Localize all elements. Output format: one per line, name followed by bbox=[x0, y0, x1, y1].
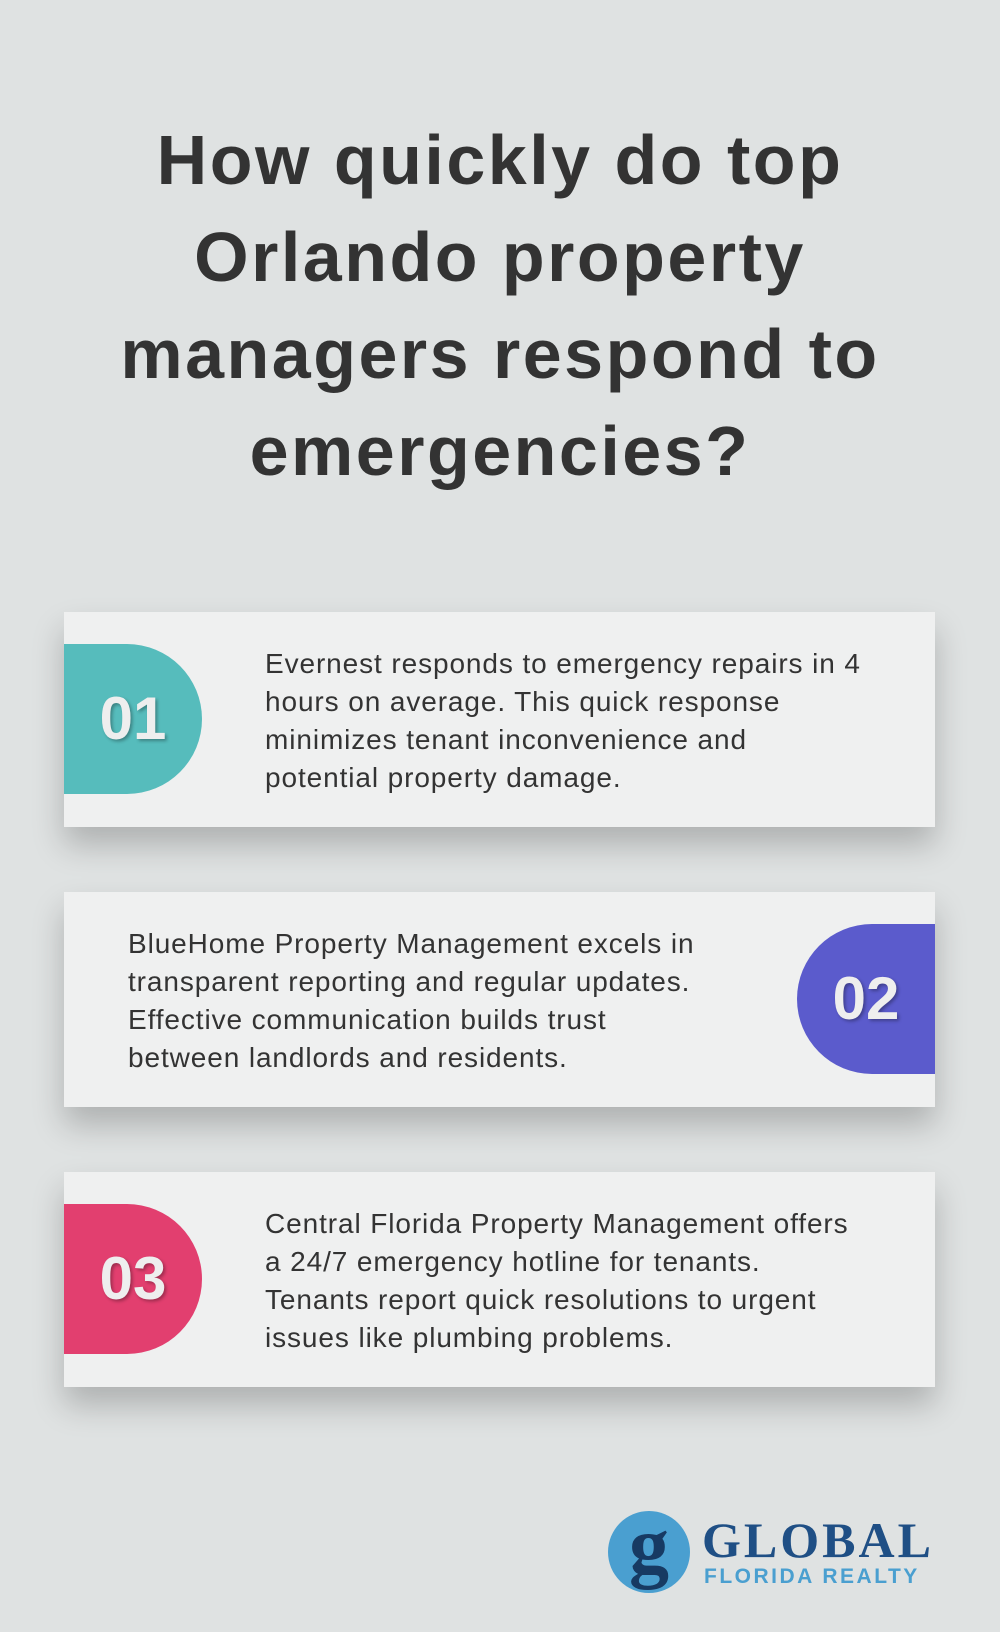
panel: card 1 bbox=[64, 612, 935, 827]
badge 03 bbox=[64, 1204, 202, 1354]
text 2: Effective communication builds trust bbox=[128, 1004, 607, 1035]
logo text: GLOBAL bbox=[702, 1512, 934, 1568]
text 2: transparent reporting and regular updates. bbox=[128, 966, 690, 997]
badge 01: 01 bbox=[100, 685, 166, 752]
badge 02 bbox=[797, 924, 935, 1074]
title: Orlando property bbox=[194, 218, 806, 296]
text 3: issues like plumbing problems. bbox=[265, 1322, 673, 1353]
logo icon bbox=[608, 1511, 690, 1593]
logo: FLORIDA REALTY bbox=[704, 1565, 920, 1588]
badge 01 bbox=[64, 644, 202, 794]
text 1: potential property damage. bbox=[265, 762, 622, 793]
logo icon: g bbox=[629, 1502, 669, 1590]
text 2: BlueHome Property Management excels in bbox=[128, 928, 694, 959]
title bbox=[120, 121, 880, 490]
text 1: minimizes tenant inconvenience and bbox=[265, 724, 747, 755]
text 3: Tenants report quick resolutions to urgent bbox=[265, 1284, 816, 1315]
text 2: between landlords and residents. bbox=[128, 1042, 568, 1073]
text 3: Central Florida Property Management offers bbox=[265, 1208, 849, 1239]
text 1: Evernest responds to emergency repairs in 4 bbox=[265, 648, 861, 679]
text 2 bbox=[128, 928, 694, 1073]
text 1: hours on average. This quick response bbox=[265, 686, 780, 717]
text 1 bbox=[265, 648, 861, 793]
badge 03: 03 bbox=[100, 1245, 166, 1312]
title: How quickly do top bbox=[157, 121, 843, 199]
text 3: a 24/7 emergency hotline for tenants. bbox=[265, 1246, 761, 1277]
title: emergencies? bbox=[250, 412, 750, 490]
badge 02: 02 bbox=[833, 965, 899, 1032]
title: managers respond to bbox=[120, 315, 880, 393]
text 3 bbox=[265, 1208, 849, 1353]
logo bbox=[608, 1502, 934, 1593]
panel: card 3 bbox=[64, 1172, 935, 1387]
panel: card 2 bbox=[64, 892, 935, 1107]
